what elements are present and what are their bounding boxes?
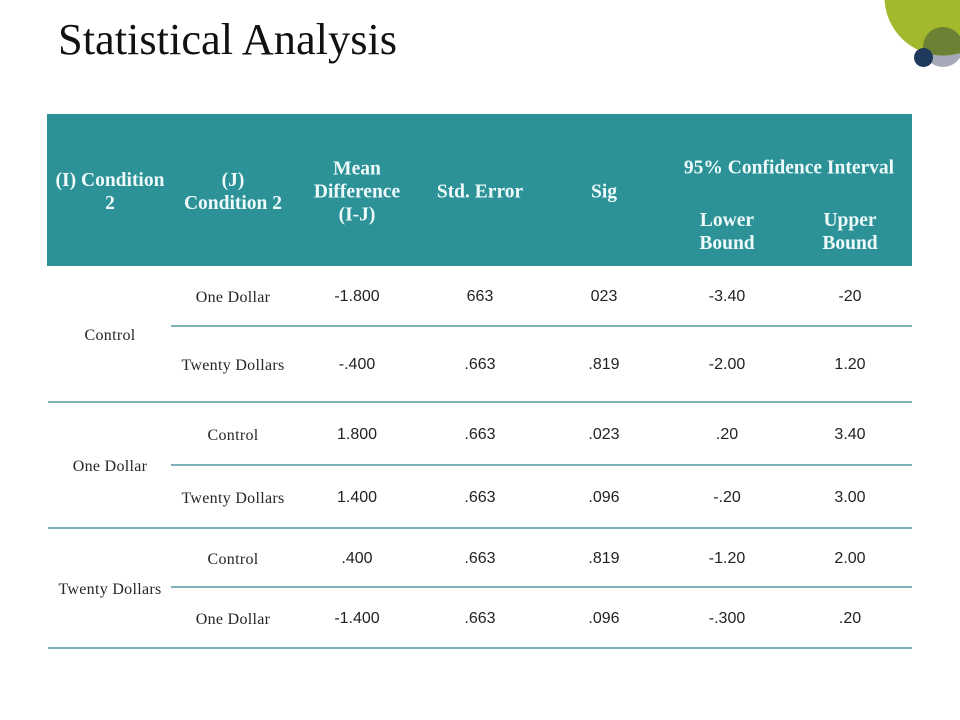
panel: statistics table: One Dollar: [196, 611, 270, 628]
header: significance: Sig: [591, 182, 617, 202]
panel: statistics table: .663: [464, 489, 496, 506]
panel: statistics table: Control: [84, 327, 136, 344]
panel: statistics table: Control: [208, 427, 258, 444]
row group labels: [58, 327, 162, 598]
header: upper bound: [822, 210, 878, 254]
row: twenty dollars vs control: [208, 550, 866, 568]
header: lower bound: Lower: [700, 210, 754, 231]
panel: statistics table: -1.800: [334, 288, 380, 305]
panel: statistics table: 1.400: [337, 489, 377, 506]
header: J condition: Condition 2: [184, 193, 282, 214]
row: one dollar vs control: [208, 426, 866, 444]
panel: statistics table: .096: [588, 610, 620, 627]
row: control vs twenty dollars: [181, 356, 866, 374]
panel: statistics table: .400: [341, 550, 373, 567]
panel: statistics table: 1.20: [834, 356, 866, 373]
row: twenty dollars vs one dollar: [196, 610, 861, 628]
header: upper bound: Upper: [823, 210, 877, 231]
panel: statistics table: -20: [838, 288, 862, 305]
panel: statistics table: 663: [467, 288, 493, 305]
panel: statistics table: -.400: [339, 356, 375, 373]
panel: statistics table: .023: [588, 426, 620, 443]
panel: statistics table: 3.40: [834, 426, 866, 443]
panel: statistics table: Twenty Dollars: [181, 357, 285, 374]
panel: statistics table: Control: [208, 551, 258, 568]
panel: statistics table: 2.00: [834, 550, 866, 567]
panel: statistics table: .663: [464, 356, 496, 373]
header: I condition: [56, 170, 164, 214]
table header band: [47, 114, 912, 266]
header: confidence interval: 95% Confidence Interval: [684, 158, 894, 178]
panel: statistics table: -.300: [709, 610, 745, 627]
header: I condition: 2: [105, 193, 115, 214]
row: control vs one dollar: [196, 288, 862, 306]
header: lower bound: Bound: [699, 233, 755, 254]
panel: statistics table: .663: [464, 550, 496, 567]
panel: statistics table: -3.40: [709, 288, 745, 305]
panel: statistics table: .663: [464, 610, 496, 627]
header: I condition: (I) Condition: [56, 170, 164, 191]
panel: statistics table: -1.400: [334, 610, 380, 627]
header: J condition: (J): [222, 170, 244, 191]
panel: statistics table: .819: [588, 550, 620, 567]
panel: statistics table: 1.800: [337, 426, 377, 443]
panel: statistics table: .663: [464, 426, 496, 443]
panel: statistics table: .20: [716, 426, 738, 443]
panel: statistics table: .20: [839, 610, 861, 627]
panel: statistics table: -1.20: [709, 550, 745, 567]
header: mean difference: [314, 158, 400, 226]
panel: statistics table: Twenty Dollars: [58, 581, 162, 598]
panel: statistics table: .096: [588, 489, 620, 506]
panel: statistics table: 023: [591, 288, 617, 305]
panel: statistics table: .819: [588, 356, 620, 373]
header: J condition: [184, 170, 282, 214]
title: Statistical Analysis: [58, 14, 397, 64]
header: mean difference: Mean: [333, 158, 381, 180]
panel: statistics table: -2.00: [709, 356, 745, 373]
header: lower bound: [699, 210, 755, 254]
header: mean difference: Difference: [314, 182, 400, 202]
row: one dollar vs twenty dollars: [181, 489, 866, 507]
header: standard error: Std. Error: [437, 182, 523, 202]
header: upper bound: Bound: [822, 233, 878, 254]
panel: statistics table: One Dollar: [73, 458, 147, 475]
header: mean difference: (I-J): [339, 204, 375, 226]
panel: statistics table: Twenty Dollars: [181, 490, 285, 507]
panel: statistics table: -.20: [713, 489, 741, 506]
panel: statistics table: 3.00: [834, 489, 866, 506]
panel: statistics table: One Dollar: [196, 289, 270, 306]
icon: decorative circles: [884, 0, 960, 67]
